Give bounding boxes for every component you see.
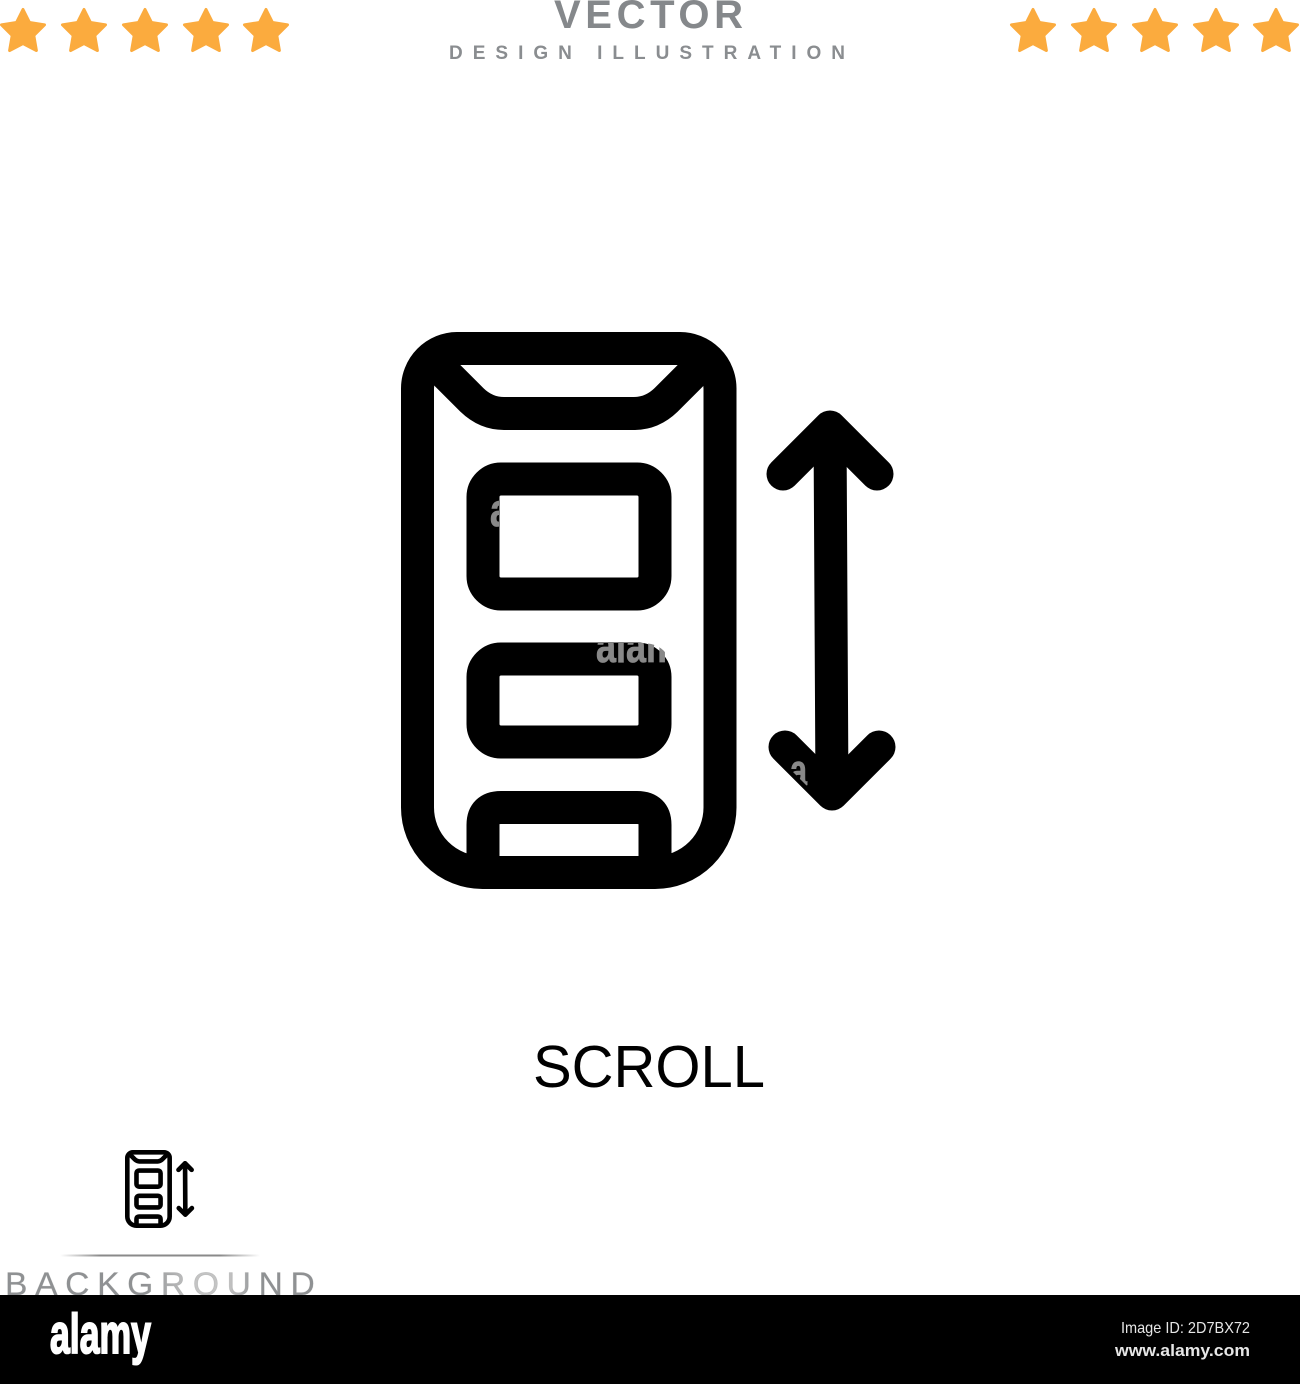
- website url: www.alamy.com: [1114, 1341, 1250, 1360]
- watermark fragments over main icon: [490, 484, 807, 795]
- main icon: phone with scrolling content: [418, 348, 879, 872]
- phone top notch band: [430, 358, 708, 414]
- content card 3, cut off at the bottom: [483, 808, 655, 870]
- content card 2: [483, 659, 655, 742]
- vertical scroll arrow: [783, 427, 879, 794]
- watermark fragments over main icon: a: [490, 484, 510, 536]
- right star rating: [1012, 10, 1298, 50]
- image id: Image ID: 2D7BX72: [1121, 1320, 1250, 1337]
- subheading: DESIGN ILLUSTRATION: DESIGN ILLUSTRATION: [449, 43, 845, 64]
- small icon thumbnail: [127, 1152, 192, 1226]
- divider rule: [60, 1254, 260, 1256]
- content card 1: [483, 479, 655, 594]
- footer bar: [0, 1295, 1300, 1384]
- label: BACKGROUND: BACKGROUND: [5, 1266, 315, 1302]
- watermark fragments over main icon: alam: [596, 620, 678, 672]
- phone body: [418, 348, 720, 872]
- alamy logo: alamy: [50, 1302, 151, 1365]
- watermark fragments over main icon: a: [790, 746, 807, 795]
- left star rating: [2, 10, 288, 50]
- title: SCROLL: SCROLL: [533, 1034, 765, 1100]
